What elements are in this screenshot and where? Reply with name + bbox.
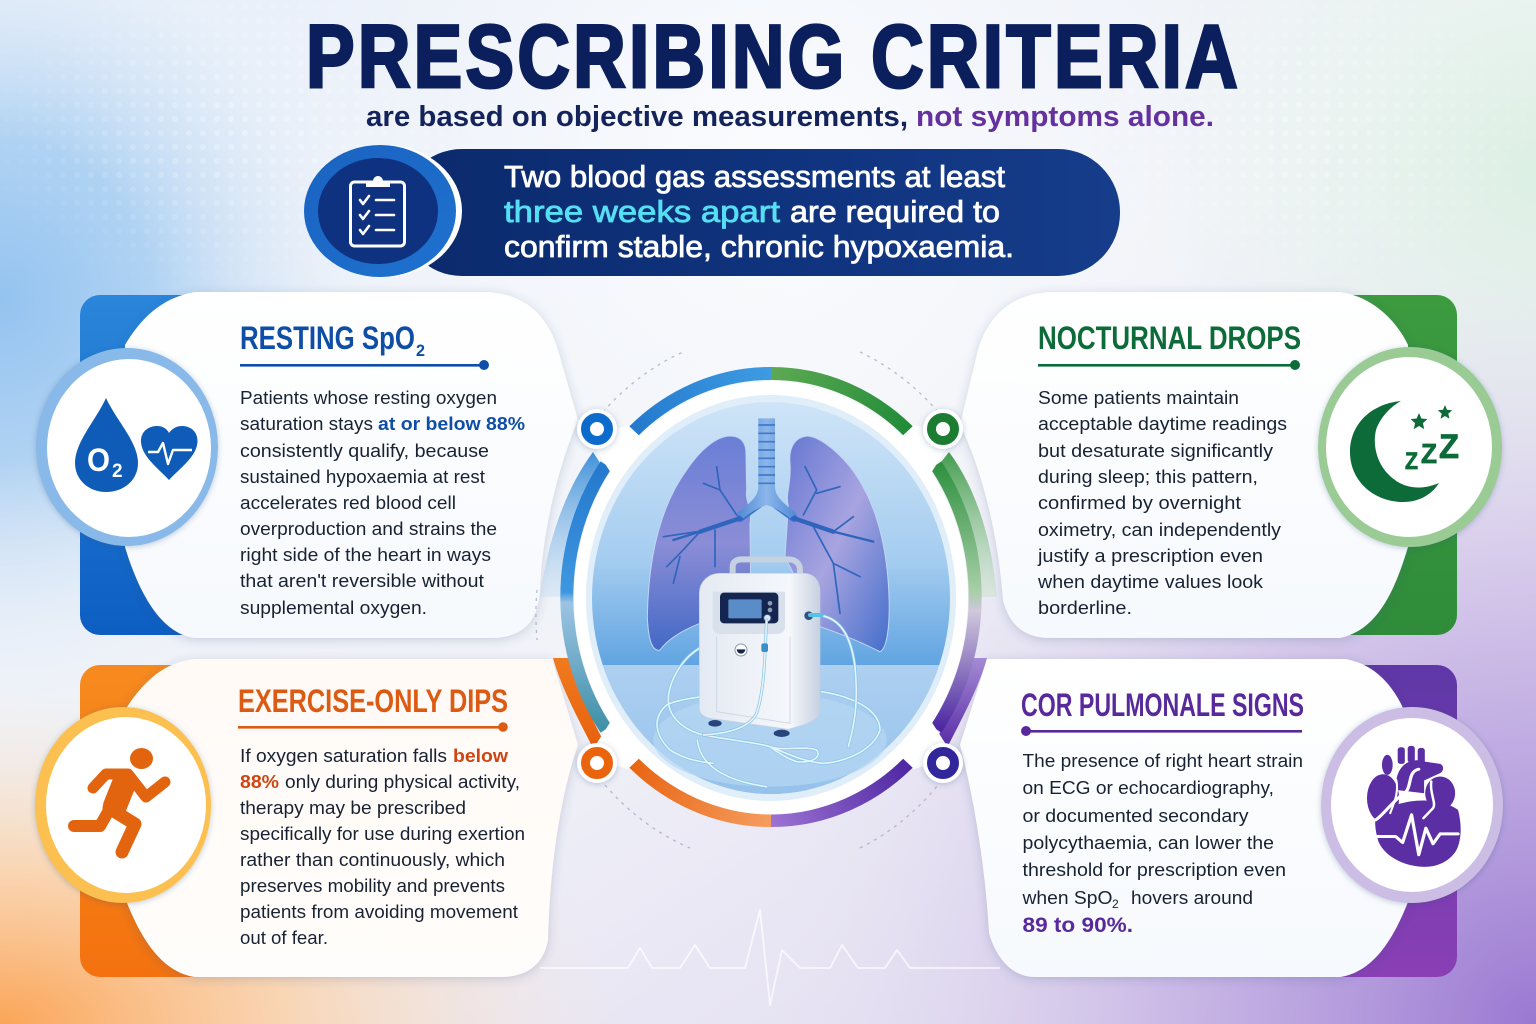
icon: moon and sleep: Z: [1439, 428, 1459, 466]
panel: nocturnal drops: [960, 292, 1502, 638]
body text: borderline.: [1038, 597, 1132, 618]
body text: when daytime values look: [1037, 571, 1264, 592]
heading: [1021, 687, 1304, 736]
oxygen tubing: [703, 615, 856, 747]
body text: consistently qualify, because: [240, 440, 489, 461]
body text: overproduction and strains the: [240, 518, 497, 539]
heartbeat line: [540, 910, 1000, 1005]
lungs: [647, 436, 889, 652]
icon: oxygen drop and heart: O: [87, 442, 110, 478]
body text: polycythaemia, can lower the: [1022, 832, 1274, 853]
heading: NOCTURNAL DROPS: [1038, 320, 1301, 356]
colour bands behind cards: [80, 295, 1457, 977]
banner: blood gas assessments: [304, 145, 1120, 277]
title: PRESCRIBING CRITERIA: [306, 6, 1241, 106]
banner text: confirm stable, chronic hypoxaemia.: [504, 229, 1014, 264]
centre illustration: lungs and oxygen concentrator: [574, 382, 968, 814]
body text: preserves mobility and prevents: [240, 875, 505, 896]
body text: when SpO: [1021, 887, 1112, 908]
heading: [238, 683, 508, 732]
subtitle: [366, 101, 1214, 133]
icon: moon and sleep: [1318, 347, 1502, 547]
body text: justify a prescription even: [1037, 545, 1263, 566]
node: green: [923, 409, 963, 449]
banner text: [504, 159, 1014, 264]
body text: specifically for use during exertion: [240, 823, 525, 844]
body text: accelerates red blood cell: [240, 492, 456, 513]
concentrator: [699, 559, 820, 737]
heading: RESTING SpO: [240, 320, 415, 356]
body text: acceptable daytime readings: [1038, 413, 1287, 434]
icon: oxygen drop and heart: [36, 348, 218, 546]
panel: resting SpO2: [36, 292, 578, 638]
body text: at or below 88%: [378, 413, 525, 434]
body text: 88%: [240, 771, 279, 792]
icon: moon and sleep: Z: [1421, 438, 1437, 469]
heading: 2: [416, 341, 425, 360]
node: orange: [577, 743, 617, 783]
body text: on ECG or echocardiography,: [1022, 777, 1274, 798]
node: indigo: [923, 743, 963, 783]
node: blue: [577, 409, 617, 449]
panel: exercise-only dips: [35, 659, 578, 977]
heading: [240, 320, 489, 370]
subtitle: not symptoms alone.: [916, 101, 1214, 133]
banner text: are required to: [790, 194, 1000, 229]
body text: [1037, 387, 1287, 618]
panel: cor pulmonale signs: [960, 659, 1503, 977]
body text: saturation stays: [240, 413, 373, 434]
icon: oxygen drop and heart: 2: [112, 461, 123, 482]
body text: oximetry, can independently: [1038, 519, 1282, 540]
icon: anatomical heart: [1321, 707, 1503, 903]
body text: out of fear.: [240, 927, 328, 948]
heading: [1038, 320, 1301, 370]
body text: below: [453, 745, 509, 766]
floor: [603, 665, 939, 794]
trachea: [737, 418, 797, 518]
body text: patients from avoiding movement: [240, 901, 518, 922]
icon: clipboard checklist: [304, 145, 462, 277]
centre ring: [540, 373, 997, 821]
body text: that aren't reversible without: [240, 570, 484, 591]
body text: The presence of right heart strain: [1022, 750, 1303, 771]
body text: 2: [1112, 897, 1119, 911]
heading: COR PULMONALE SIGNS: [1021, 687, 1304, 723]
heading: EXERCISE-ONLY DIPS: [238, 683, 508, 719]
body text: right side of the heart in ways: [240, 544, 491, 565]
banner text: Two blood gas assessments at least: [504, 159, 1005, 194]
body text: If oxygen saturation falls: [240, 745, 447, 766]
body text: 89 to 90%.: [1022, 914, 1133, 937]
banner text: three weeks apart: [504, 194, 780, 229]
icon: runner: [35, 707, 211, 903]
body text: threshold for prescription even: [1022, 859, 1286, 880]
body text: confirmed by overnight: [1038, 492, 1241, 513]
body text: Patients whose resting oxygen: [240, 387, 497, 408]
body text: or documented secondary: [1022, 805, 1249, 826]
body text: [240, 387, 525, 618]
body text: supplemental oxygen.: [240, 597, 427, 618]
body text: rather than continuously, which: [240, 849, 505, 870]
body text: Some patients maintain: [1038, 387, 1239, 408]
body text: sustained hypoxaemia at rest: [240, 466, 485, 487]
dashed orbit around centre: [536, 352, 938, 848]
body text: during sleep; this pattern,: [1038, 466, 1258, 487]
body text: only during physical activity,: [285, 771, 520, 792]
back tubing: [657, 648, 880, 787]
body text: [1021, 750, 1303, 937]
body text: therapy may be prescribed: [240, 797, 466, 818]
body text: hovers around: [1131, 887, 1253, 908]
body text: but desaturate significantly: [1038, 440, 1274, 461]
body text: [240, 745, 525, 948]
icon: moon and sleep: Z: [1405, 448, 1418, 475]
subtitle: are based on objective measurements,: [366, 101, 908, 133]
